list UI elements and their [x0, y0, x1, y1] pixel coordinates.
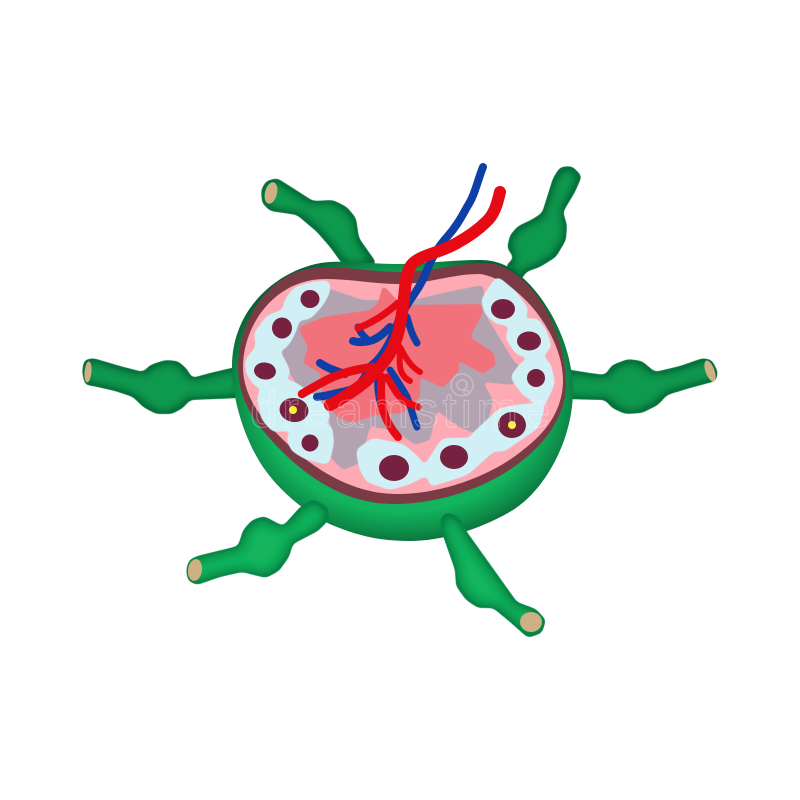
red artery with branches [302, 192, 500, 437]
vessel: top right lymph vessel [505, 166, 582, 282]
blue vein with branches [317, 167, 483, 427]
nucleoli: yellow dots [289, 406, 516, 429]
vessel: top left lymph vessel [261, 178, 378, 265]
interior: grey paracortex [280, 285, 520, 470]
capsule: outer green node body [232, 260, 573, 541]
vessel: right lymph vessel [565, 358, 718, 414]
vessel: left lymph vessel [82, 358, 240, 414]
vessel: bottom left lymph vessel [186, 499, 329, 585]
interior: coral medulla [298, 285, 496, 423]
follicles: pale blue cells [246, 277, 554, 489]
watermark: dreamstime: dreamstime [250, 382, 550, 438]
vessel: bottom right lymph vessel [440, 512, 546, 638]
nuclei: dark maroon cell nuclei [253, 290, 545, 481]
capsule: maroon inner layer [238, 263, 566, 504]
interior: pink cortex [243, 274, 563, 494]
